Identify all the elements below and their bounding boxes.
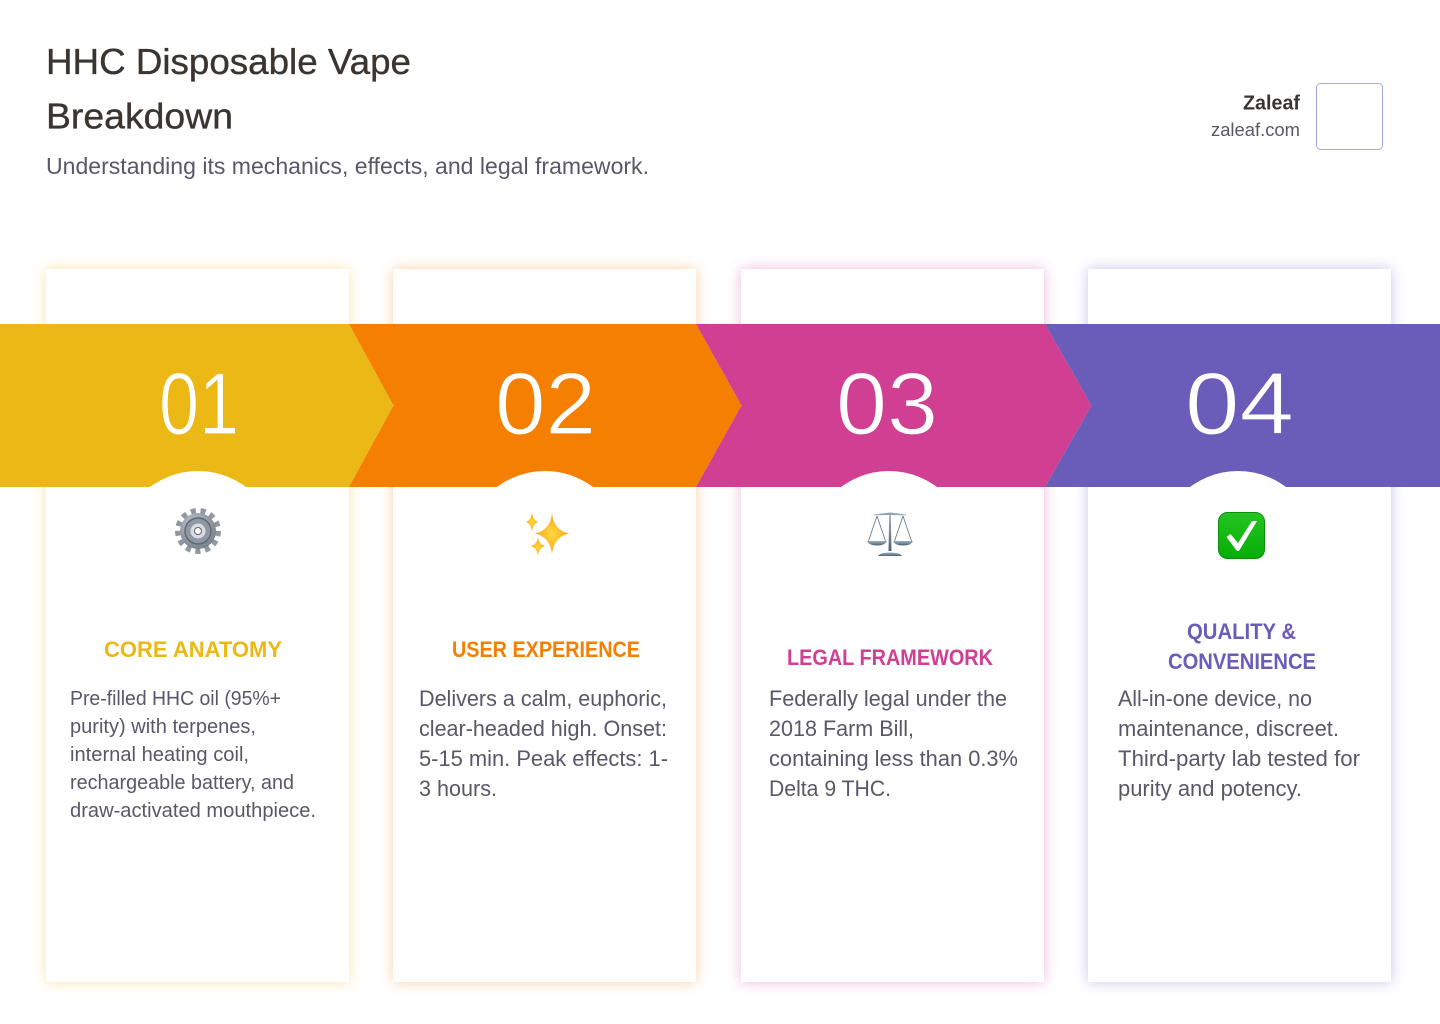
title: HHC Disposable Vape: [46, 41, 411, 82]
brand name: Zaleaf: [1243, 92, 1300, 114]
body text: clear-headed high. Onset:: [419, 716, 667, 741]
body text: maintenance, discreet.: [1118, 716, 1339, 741]
body text: 5-15 min. Peak effects: 1-: [419, 746, 668, 771]
heading: CONVENIENCE: [1168, 649, 1316, 674]
heading: LEGAL FRAMEWORK: [787, 645, 993, 670]
panel: legal framework: [696, 269, 1092, 982]
body text: rechargeable battery, and: [70, 772, 294, 794]
body text: purity) with terpenes,: [70, 716, 256, 738]
panel: quality and convenience: [1045, 269, 1440, 982]
body text: 3 hours.: [419, 776, 497, 801]
body text: Federally legal under the: [769, 686, 1007, 711]
body text: purity and potency.: [1118, 776, 1302, 801]
title: Breakdown: [46, 96, 233, 136]
card: [1088, 269, 1391, 982]
body text: Pre-filled HHC oil (95%+: [70, 688, 281, 710]
panel: user experience: [349, 269, 742, 982]
body text: containing less than 0.3%: [769, 746, 1018, 771]
number 02: 02: [495, 354, 596, 453]
brand url: zaleaf.com: [1211, 120, 1300, 140]
body text: internal heating coil,: [70, 744, 249, 766]
icon backdrop: [150, 471, 246, 487]
chevron band 04: [1045, 324, 1440, 487]
heading: [1168, 619, 1316, 674]
number 01: 01: [159, 354, 239, 453]
heading: USER EXPERIENCE: [452, 637, 640, 662]
title: [46, 41, 411, 136]
chevron band 01: [0, 324, 394, 487]
icon: balance scale: [867, 512, 913, 556]
body text: Third-party lab tested for: [1118, 746, 1360, 771]
body text: 2018 Farm Bill,: [769, 716, 914, 741]
card: [46, 269, 349, 982]
icon backdrop: [1190, 471, 1286, 487]
icon: check mark: [1218, 512, 1264, 558]
card: [393, 269, 696, 982]
body text: draw-activated mouthpiece.: [70, 800, 316, 822]
brand block: [1211, 84, 1382, 150]
icon: gear: [178, 512, 218, 550]
icon backdrop: [841, 471, 937, 487]
subtitle: Understanding its mechanics, effects, and legal framework.: [46, 153, 649, 179]
body text: Delta 9 THC.: [769, 776, 891, 801]
panel: core anatomy: [0, 269, 394, 982]
heading: CORE ANATOMY: [104, 637, 282, 662]
chevron band 03: [696, 324, 1092, 487]
card: [741, 269, 1044, 982]
chevron band 02: [349, 324, 742, 487]
logo placeholder: [1316, 84, 1382, 150]
number 03: 03: [836, 354, 938, 453]
header: title and subtitle: [46, 41, 649, 179]
body text: [70, 688, 316, 822]
body text: [1118, 686, 1360, 801]
icon: sparkles: [526, 512, 569, 556]
body text: [419, 686, 668, 801]
number 04: 04: [1185, 354, 1294, 453]
body text: All-in-one device, no: [1118, 686, 1312, 711]
body text: Delivers a calm, euphoric,: [419, 686, 667, 711]
heading: QUALITY &: [1187, 619, 1296, 644]
body text: [769, 686, 1018, 801]
icon backdrop: [497, 471, 593, 487]
